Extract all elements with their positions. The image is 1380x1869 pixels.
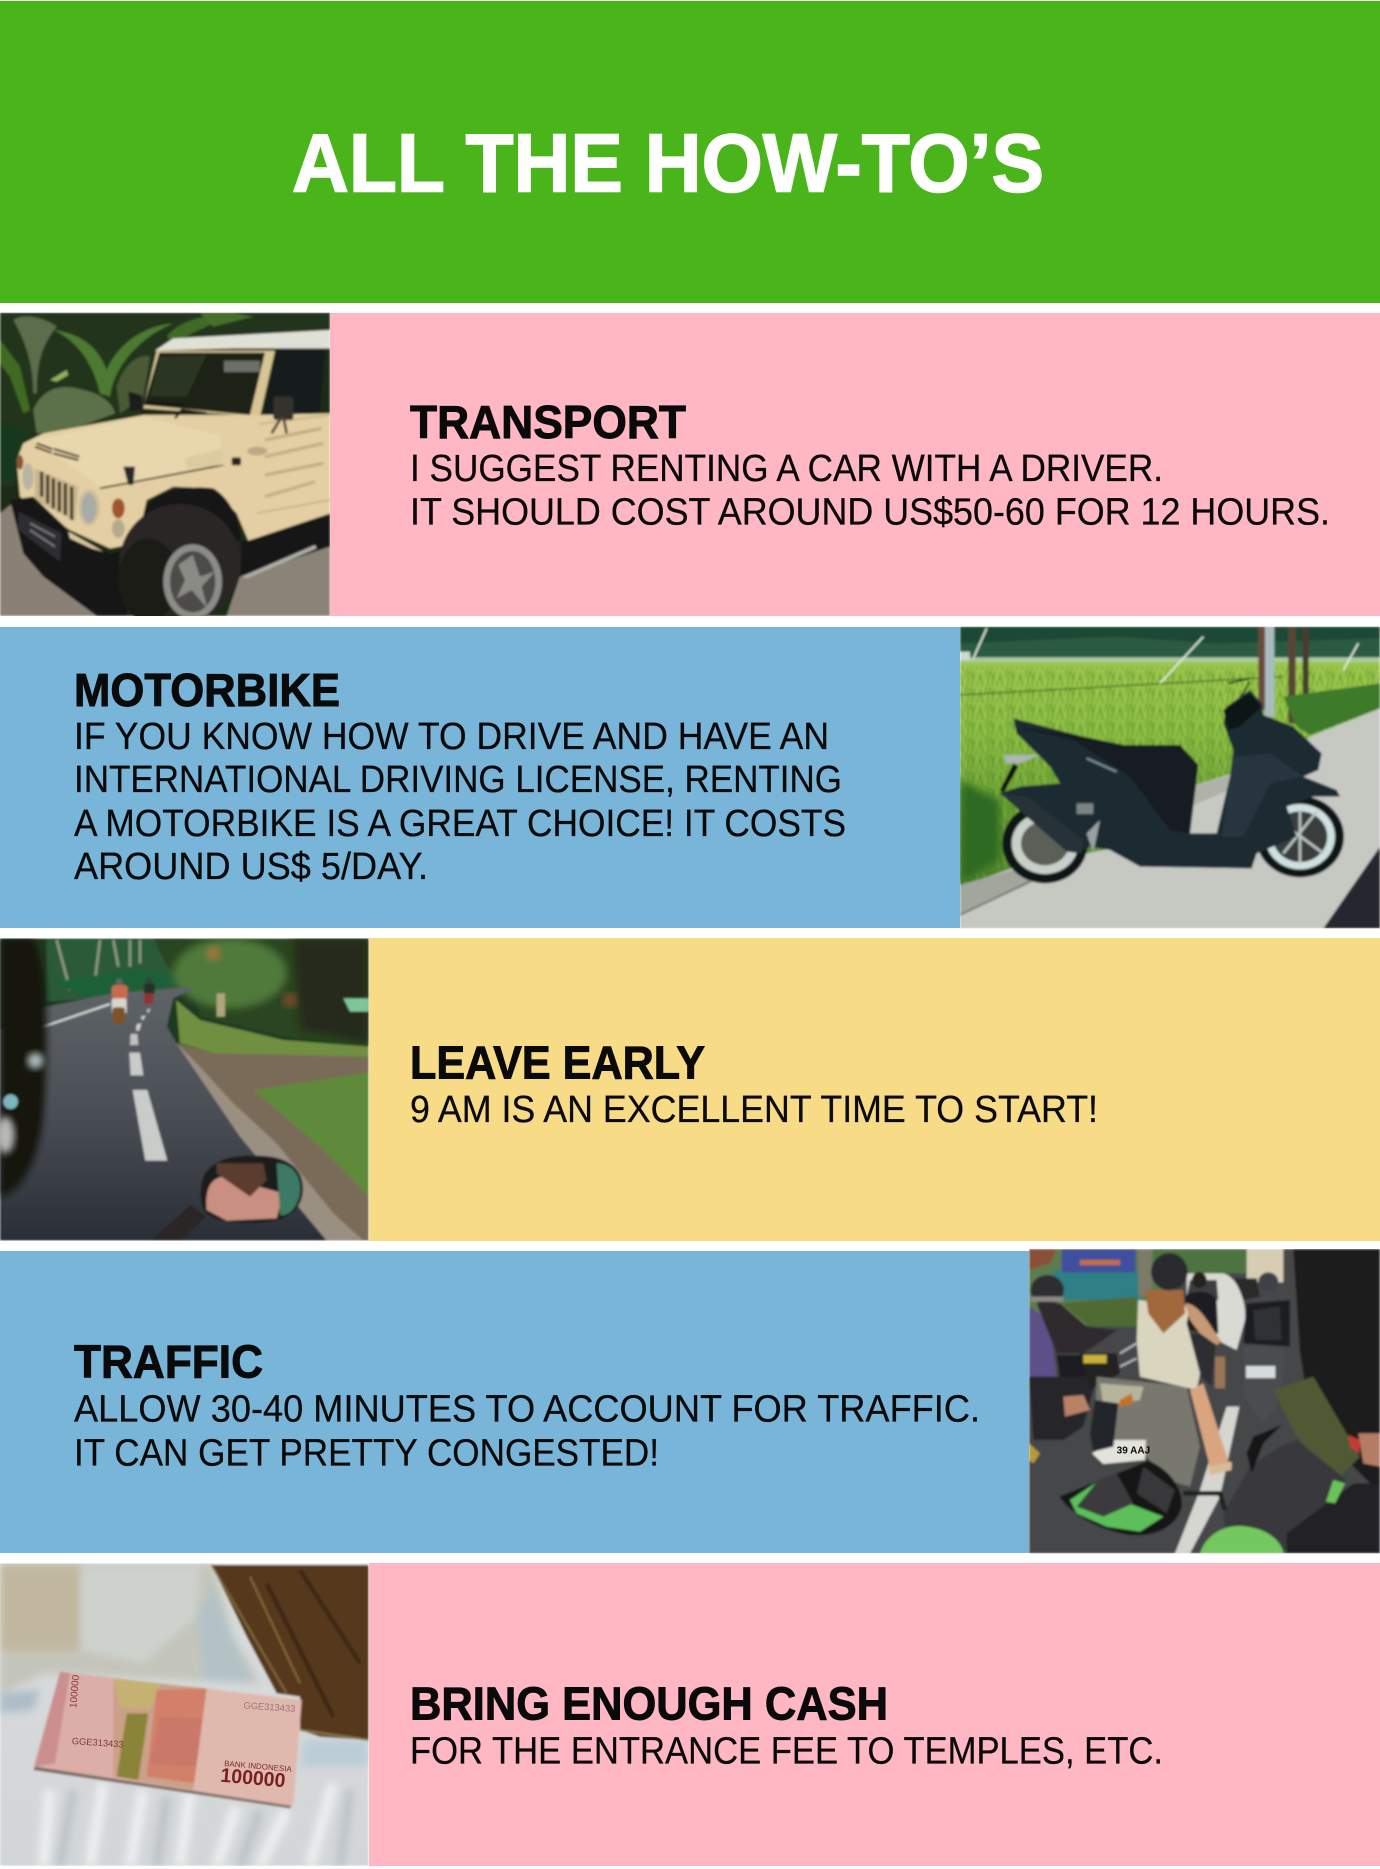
text: leave early advice: 9 AM IS AN EXCELLENT TIME TO START! — [410, 1089, 1098, 1131]
centre scooter — [1093, 1377, 1200, 1487]
text: transport advice: IT SHOULD COST AROUND US$50-60 FOR 12 HOURS. — [410, 492, 1330, 534]
text: traffic advice: IT CAN GET PRETTY CONGESTED! — [74, 1432, 659, 1474]
photo: rupiah banknotes on bed: BANK INDONESIA — [224, 1759, 293, 1774]
scooter — [1002, 803, 1088, 883]
jeep — [0, 500, 100, 616]
photo: cream jeep — [0, 313, 330, 623]
grille — [35, 468, 78, 522]
right helmet and jacket — [1293, 1249, 1380, 1493]
heading: traffic: TRAFFIC — [74, 1336, 263, 1388]
bumper — [10, 497, 137, 616]
title: ALL THE HOW-TO’S — [292, 116, 1044, 210]
photo: road from motorbike — [0, 938, 369, 1241]
photo: rupiah banknotes on bed: GGE313433 — [72, 1736, 124, 1750]
helmet edge — [0, 938, 47, 1197]
heading: transport: TRANSPORT — [410, 396, 686, 448]
photo: black scooter — [960, 627, 1380, 928]
text: traffic advice: ALLOW 30-40 MINUTES TO ACCOUNT FOR TRAFFIC. — [74, 1388, 980, 1430]
mirror — [1059, 1461, 1182, 1535]
photo: motorbike traffic — [1029, 1249, 1380, 1553]
text: transport advice: I SUGGEST RENTING A CAR WITH A DRIVER. — [410, 448, 1163, 490]
banknotes — [33, 1672, 302, 1806]
photo: rupiah banknotes on bed: 100000 — [68, 1674, 82, 1709]
photo: motorbike traffic: 39 AAJ — [1117, 1445, 1150, 1456]
backpack rider — [1256, 1271, 1280, 1285]
text: transport advice — [410, 448, 1330, 534]
mirror — [152, 1205, 207, 1241]
panel: traffic — [0, 1249, 1380, 1553]
heading: motorbike: MOTORBIKE — [74, 664, 340, 716]
panel: motorbike — [0, 627, 1380, 928]
text: traffic advice — [74, 1388, 980, 1474]
text: motorbike advice: IF YOU KNOW HOW TO DRIVE AND HAVE AN — [74, 716, 829, 758]
heading: bring enough cash: BRING ENOUGH CASH — [410, 1678, 888, 1730]
panel: transport — [0, 313, 1380, 623]
text: motorbike advice: INTERNATIONAL DRIVING LICENSE, RENTING — [74, 759, 842, 801]
photo: rupiah banknotes on bed: GGE313433 — [243, 1700, 296, 1714]
text: motorbike advice: A MOTORBIKE IS A GREAT CHOICE! IT COSTS — [74, 803, 846, 845]
panel: bring enough cash — [0, 1563, 1380, 1866]
photo: rupiah banknotes on bed: 100000 — [220, 1765, 286, 1792]
text: motorbike advice: AROUND US$ 5/DAY. — [74, 846, 428, 888]
heading: leave early: LEAVE EARLY — [410, 1036, 705, 1088]
left riders — [1029, 1307, 1057, 1380]
header banner — [0, 1, 1380, 303]
car — [1187, 1273, 1245, 1350]
panel: leave early — [0, 938, 1380, 1241]
text: cash advice: FOR THE ENTRANCE FEE TO TEMPLES, ETC. — [410, 1730, 1163, 1772]
other rider — [1185, 1291, 1218, 1333]
text: motorbike advice — [74, 716, 846, 888]
dress rider — [1137, 1300, 1200, 1390]
wheel — [137, 487, 330, 577]
photo: rupiah banknotes on bed — [0, 1563, 369, 1866]
